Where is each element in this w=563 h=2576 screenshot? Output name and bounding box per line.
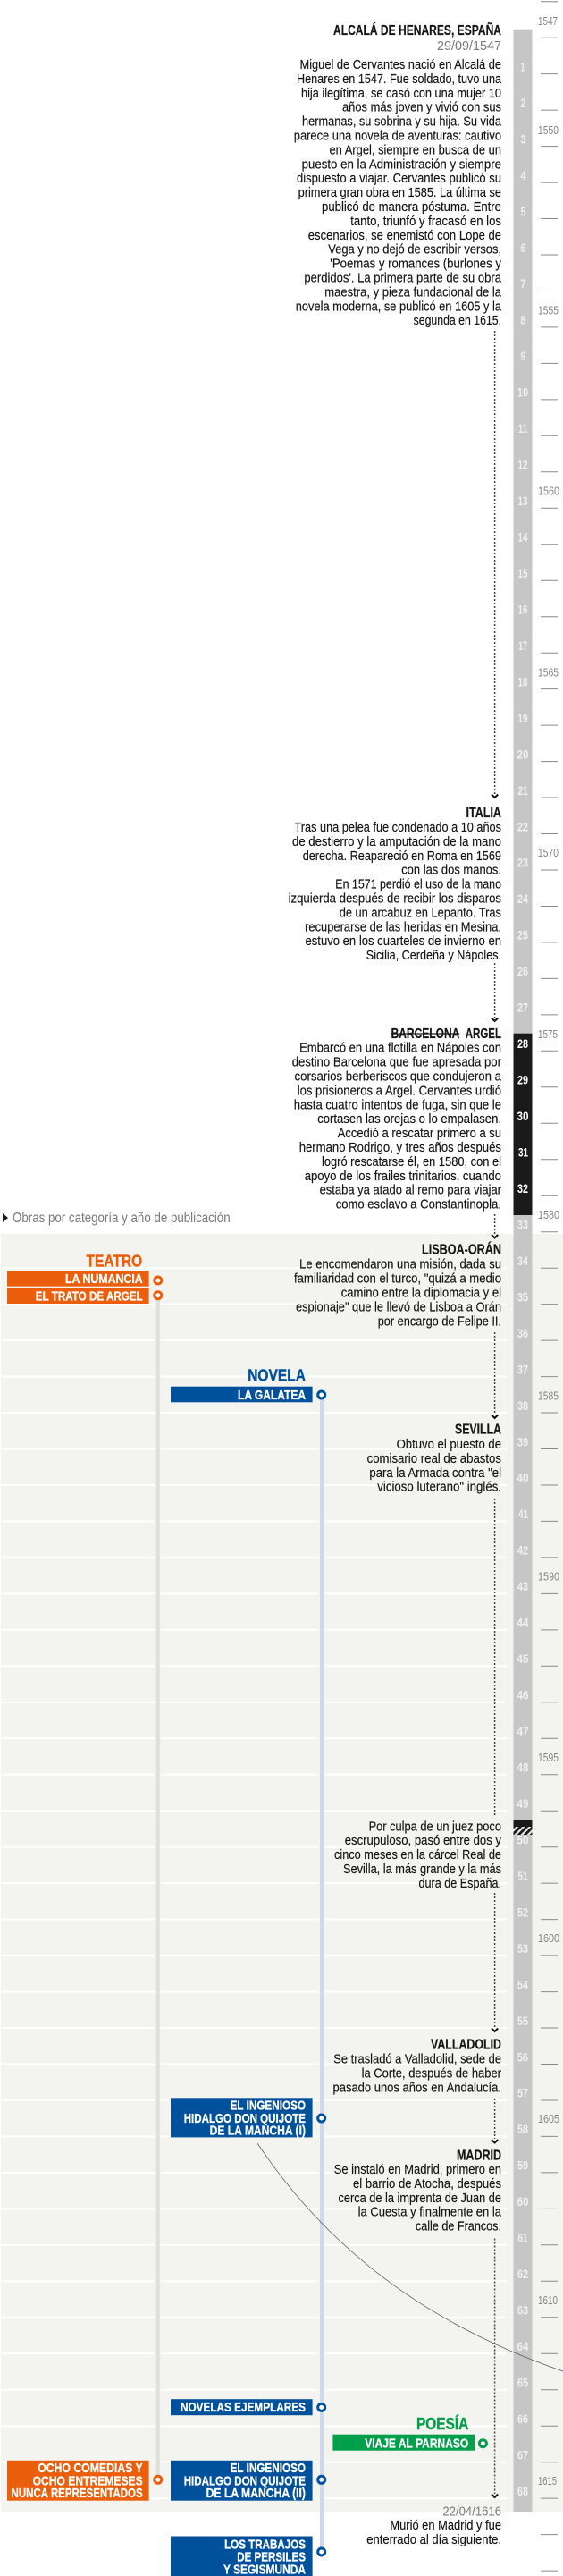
age numbers: 36 xyxy=(517,1327,528,1340)
paragraph: Embarcó en una flotilla en Nápoles con xyxy=(299,1042,501,1056)
paragraph: la Corte, después de haber xyxy=(362,2067,501,2082)
age numbers: 50 xyxy=(517,1833,529,1846)
paragraph: pasado unos años en Andalucía. xyxy=(332,2081,501,2095)
arrow: Valladolid to Madrid xyxy=(492,2099,498,2142)
timeline ticks xyxy=(541,2,558,2571)
paragraph: Sicilia, Cerdeña y Nápoles. xyxy=(366,949,501,963)
age numbers: 34 xyxy=(517,1254,528,1268)
age numbers: 3 xyxy=(520,132,526,146)
paragraph: Obtuvo el puesto de xyxy=(397,1438,501,1452)
arrow: Sevilla to prison note xyxy=(494,1499,496,1817)
work: Los trabajos de Persiles: DE PERSILES xyxy=(237,2550,306,2564)
work: Don Quijote II xyxy=(171,2461,325,2501)
work: Don Quijote I xyxy=(171,2098,325,2139)
year labels xyxy=(538,14,559,2487)
text block: Italia xyxy=(289,806,501,963)
work: Viaje al Parnaso: VIAJE AL PARNASO xyxy=(365,2436,469,2451)
paragraph: derecha. Reapareció en Roma en 1569 xyxy=(303,849,501,864)
biography: Vega y no dejó de escribir versos, xyxy=(328,243,501,258)
text block: prison note: escrupuloso, pasó entre dos y xyxy=(345,1834,502,1848)
age numbers: 49 xyxy=(517,1797,529,1811)
text block: death xyxy=(366,2505,501,2547)
text block: Barcelona / Argel xyxy=(292,1026,502,1212)
panel: works background xyxy=(1,1234,563,2512)
paragraph: destino Barcelona que fue apresada por xyxy=(292,1056,501,1070)
age numbers: 11 xyxy=(518,422,527,435)
paragraph: logró rescatarse él, en 1580, con el xyxy=(322,1155,501,1170)
age bar xyxy=(513,30,533,2512)
text block: prison note: Por culpa de un juez poco xyxy=(369,1820,501,1834)
text block: Madrid xyxy=(334,2148,502,2234)
bar: prison in Sevilla xyxy=(513,1820,533,1835)
text block: prison note xyxy=(334,1820,502,1891)
timeline line xyxy=(155,1296,161,2479)
heading: SEVILLA xyxy=(455,1423,501,1438)
work: Ocho comedias xyxy=(7,2461,162,2501)
age numbers: 14 xyxy=(518,531,528,544)
work: Don Quijote I: EL INGENIOSO xyxy=(231,2099,306,2114)
age numbers: 26 xyxy=(517,965,528,978)
age numbers: 65 xyxy=(517,2377,528,2389)
work: Novelas ejemplares: NOVELAS EJEMPLARES xyxy=(181,2400,306,2415)
biography: dispuesto a viajar. Cervantes publicó su xyxy=(297,172,501,186)
age numbers: 20 xyxy=(517,747,529,761)
age numbers: 39 xyxy=(517,1435,528,1448)
biography xyxy=(294,58,502,328)
paragraph: En 1571 perdió el uso de la mano xyxy=(335,878,501,892)
heading: MADRID xyxy=(457,2148,501,2163)
paragraph: Murió en Madrid y fue xyxy=(390,2519,501,2533)
age numbers: 1 xyxy=(520,60,525,73)
paragraph xyxy=(292,1042,502,1212)
age numbers: 38 xyxy=(517,1399,528,1413)
age numbers: 64 xyxy=(517,2340,529,2353)
age numbers: 33 xyxy=(517,1218,528,1231)
paragraph xyxy=(367,1438,501,1495)
age numbers: 8 xyxy=(520,314,526,327)
age numbers: 67 xyxy=(517,2448,528,2462)
work: Don Quijote II: HIDALGO DON QUIJOTE xyxy=(184,2473,306,2488)
text block: Alcalá de Henares xyxy=(294,22,502,328)
age numbers: 27 xyxy=(517,1001,528,1015)
paragraph: cerca de la imprenta de Juan de xyxy=(338,2192,501,2206)
column: teatro xyxy=(7,1252,162,2501)
age numbers: 46 xyxy=(517,1689,529,1702)
biography: en Argel, siempre en busca de un xyxy=(329,143,501,157)
paragraph: apoyo de los frailes trinitarios, cuando xyxy=(305,1170,501,1184)
age numbers: 18 xyxy=(518,675,528,688)
age numbers: 9 xyxy=(520,350,525,363)
timeline line xyxy=(318,1395,325,2552)
curve: Don Quijote leader line xyxy=(257,2143,563,2371)
category heading: POESÍA xyxy=(416,2414,468,2433)
bar: life timeline xyxy=(513,30,533,2512)
work: Don Quijote II: EL INGENIOSO xyxy=(231,2461,306,2476)
text block: prison note: dura de España. xyxy=(418,1877,501,1891)
paragraph: Se trasladó a Valladolid, sede de xyxy=(333,2053,501,2067)
paragraph: la Cuesta y finalmente en la xyxy=(358,2206,502,2220)
age numbers: 63 xyxy=(517,2303,528,2318)
column: novela xyxy=(171,1365,325,2576)
age numbers: 30 xyxy=(517,1110,529,1123)
biography: 'Poemas y romances (burlones y xyxy=(330,258,502,272)
age numbers: 59 xyxy=(517,2159,528,2173)
work: La Galatea: LA GALATEA xyxy=(238,1388,306,1403)
biography: hija ilegítima, se casó con una mujer 10 xyxy=(301,87,501,101)
work: Ocho comedias: OCHO ENTREMESES xyxy=(33,2473,143,2488)
work: La Galatea xyxy=(171,1387,325,1403)
paragraph: enterrado al día siguiente. xyxy=(366,2533,501,2547)
arrow: Lisboa to Sevilla xyxy=(492,1332,498,1418)
year grid lines xyxy=(1,1268,507,2498)
age numbers: 29 xyxy=(517,1074,528,1087)
paragraph: estaba ya atado al remo para viajar xyxy=(320,1184,501,1198)
paragraph: los prisioneros a Argel. Cervantes urdió xyxy=(298,1084,501,1098)
arrow: Barcelona to Lisboa xyxy=(492,1214,498,1237)
age numbers: 7 xyxy=(520,277,525,291)
death date: 22/04/1616 xyxy=(442,2505,501,2520)
paragraph: espionaje" que le llevó de Lisboa a Orán xyxy=(296,1300,501,1314)
biography: maestra, y pieza fundacional de la xyxy=(324,285,502,300)
age numbers: 40 xyxy=(517,1472,529,1485)
age numbers: 54 xyxy=(517,1978,528,1991)
heading: VALLADOLID xyxy=(431,2037,501,2053)
paragraph xyxy=(332,2053,501,2095)
age numbers: 25 xyxy=(517,929,528,942)
work: Ocho comedias: OCHO COMEDIAS Y xyxy=(38,2461,143,2476)
paragraph: cortasen las orejas o lo empalasen. xyxy=(317,1112,501,1127)
age numbers: 47 xyxy=(517,1725,529,1738)
text block: Sevilla xyxy=(367,1423,501,1495)
age numbers: 51 xyxy=(518,1870,528,1883)
age numbers: 43 xyxy=(517,1580,528,1593)
paragraph: Le encomendaron una misión, dada su xyxy=(299,1258,501,1272)
biography: publicó de manera póstuma. Entre xyxy=(322,200,501,215)
age numbers: 15 xyxy=(518,567,528,580)
age numbers: 12 xyxy=(518,459,527,472)
text block: Valladolid xyxy=(332,2037,501,2095)
age numbers: 17 xyxy=(518,639,527,653)
heading: ALCALÁ DE HENARES, ESPAÑA xyxy=(333,22,501,38)
biography: escenarios, se enemistó con Lope de xyxy=(308,229,501,243)
age numbers: 42 xyxy=(517,1544,528,1558)
age numbers: 19 xyxy=(518,712,527,725)
age numbers: 5 xyxy=(520,205,526,218)
work: Don Quijote I: HIDALGO DON QUIJOTE xyxy=(184,2111,306,2126)
age numbers: 68 xyxy=(517,2485,528,2498)
arrow: Italia to Barcelona xyxy=(492,963,498,1021)
age numbers: 2 xyxy=(520,97,525,110)
biography: Henares en 1547. Fue soldado, tuvo una xyxy=(297,72,502,87)
paragraph: izquierda después de recibir los disparos xyxy=(289,892,501,907)
paragraph: por encargo de Felipe II. xyxy=(378,1314,501,1329)
age numbers: 23 xyxy=(517,857,528,870)
text block: Lisboa-Orán xyxy=(294,1242,501,1329)
age numbers: 44 xyxy=(517,1617,529,1630)
paragraph: Se instaló en Madrid, primero en xyxy=(334,2163,501,2177)
paragraph xyxy=(294,1258,501,1329)
age numbers: 57 xyxy=(517,2087,528,2100)
paragraph xyxy=(334,2163,502,2234)
work: La Numancia: LA NUMANCIA xyxy=(65,1271,143,1287)
paragraph: para la Armada contra "el xyxy=(369,1466,501,1481)
work: Don Quijote I: DE LA MANCHA (I) xyxy=(210,2124,306,2139)
heading: BARCELONA xyxy=(391,1026,459,1042)
age numbers: 66 xyxy=(517,2412,528,2426)
biography: hermanas, su sobrina y su hija. Su vida xyxy=(302,115,502,130)
age numbers: 6 xyxy=(520,241,526,255)
paragraph: Tras una pelea fue condenado a 10 años xyxy=(295,821,501,835)
text block: prison note: Sevilla, la más grande y la más xyxy=(343,1862,501,1877)
age numbers xyxy=(517,60,529,2498)
paragraph: calle de Francos. xyxy=(416,2220,501,2234)
work: La Numancia xyxy=(7,1271,162,1287)
age numbers: 56 xyxy=(517,2050,528,2064)
age numbers: 10 xyxy=(517,386,528,400)
paragraph xyxy=(289,821,501,963)
heading: ITALIA xyxy=(466,806,501,821)
biography: parece una novela de aventuras: cautivo xyxy=(294,129,501,143)
work: El trato de Argel: EL TRATO DE ARGEL xyxy=(36,1289,143,1305)
age numbers: 31 xyxy=(518,1146,528,1159)
paragraph: familiaridad con el turco, "quizá a medio xyxy=(294,1272,501,1287)
age numbers: 32 xyxy=(517,1182,528,1195)
paragraph: con las dos manos. xyxy=(401,864,501,878)
age numbers: 22 xyxy=(517,820,528,833)
age numbers: 35 xyxy=(517,1290,528,1304)
heading: ARGEL xyxy=(466,1026,501,1042)
arrow: prison to Valladolid xyxy=(492,1893,498,2031)
age numbers: 62 xyxy=(517,2268,528,2281)
paragraph: como esclavo a Constantinopla. xyxy=(336,1198,501,1212)
biography: segunda en 1615. xyxy=(414,314,501,328)
age numbers: 28 xyxy=(517,1037,528,1051)
biography: años más joven y vivió con sus xyxy=(342,101,501,115)
column: poesía xyxy=(332,2414,486,2451)
age numbers: 48 xyxy=(517,1761,529,1774)
age numbers: 37 xyxy=(517,1363,528,1376)
biography: Miguel de Cervantes nació en Alcalá de xyxy=(300,58,501,72)
age numbers: 16 xyxy=(518,603,528,617)
age numbers: 53 xyxy=(517,1942,528,1955)
age numbers: 13 xyxy=(518,494,528,508)
paragraph: estuvo en los cuarteles de invierno en xyxy=(306,934,501,949)
biography: primera gran obra en 1585. La última se xyxy=(298,186,501,200)
age numbers: 41 xyxy=(518,1508,528,1521)
work: Los trabajos de Persiles xyxy=(171,2536,325,2576)
biography: perdidos'. La primera parte de su obra xyxy=(304,272,502,286)
biography: puesto en la Administración y siempre xyxy=(302,157,501,172)
arrow: Madrid to death xyxy=(492,2239,498,2497)
age numbers: 4 xyxy=(520,169,526,182)
paragraph: hermano Rodrigo, y tres años después xyxy=(299,1141,501,1155)
work: Viaje al Parnaso xyxy=(332,2435,486,2451)
paragraph: recuperarse de las heridas en Mesina, xyxy=(305,920,501,934)
legend: works by category and year: Obras por categoría y año de publicación xyxy=(13,1211,231,1226)
work: Don Quijote II: DE LA MANCHA (II) xyxy=(206,2486,306,2501)
bar: captivity in Argel xyxy=(513,1034,533,1215)
paragraph: camino entre la diplomacia y el xyxy=(341,1286,501,1300)
age numbers: 61 xyxy=(518,2232,528,2245)
age numbers: 52 xyxy=(517,1905,528,1919)
paragraph: comisario real de abastos xyxy=(367,1452,501,1466)
age numbers: 55 xyxy=(517,2014,528,2028)
work: Ocho comedias: NUNCA REPRESENTADOS xyxy=(11,2486,143,2501)
paragraph: el barrio de Atocha, después xyxy=(353,2177,501,2192)
arrow: Alcalá to Italia xyxy=(492,331,498,798)
age numbers: 24 xyxy=(517,892,528,906)
biography: tanto, triunfó y fracasó en los xyxy=(350,215,501,229)
text block: prison note: cinco meses en la cárcel Real de xyxy=(334,1848,501,1862)
birth date: 29/09/1547 xyxy=(437,39,501,54)
age numbers: 58 xyxy=(517,2123,528,2136)
paragraph: corsarios berberiscos que condujeron a xyxy=(295,1069,502,1084)
paragraph: Accedió a rescatar primero a su xyxy=(338,1127,501,1141)
age numbers: 21 xyxy=(518,784,528,798)
paragraph: de destierro y la amputación de la mano xyxy=(292,835,501,849)
work: Los trabajos de Persiles: LOS TRABAJOS xyxy=(224,2538,306,2553)
age numbers: 45 xyxy=(517,1652,529,1666)
age numbers: 60 xyxy=(517,2195,529,2209)
paragraph: vicioso luterano" inglés. xyxy=(377,1481,501,1495)
category heading: NOVELA xyxy=(248,1365,306,1384)
paragraph: de un arcabuz en Lepanto. Tras xyxy=(340,906,501,920)
paragraph xyxy=(366,2519,501,2547)
heading: LISBOA-ORÁN xyxy=(422,1242,501,1257)
category heading: TEATRO xyxy=(86,1252,142,1271)
paragraph: hasta cuatro intentos de fuga, sin que le xyxy=(294,1098,501,1112)
biography: novela moderna, se publicó en 1605 y la xyxy=(296,300,502,314)
